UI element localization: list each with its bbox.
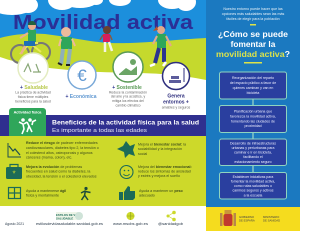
text: intro: Nuestro entorno puede hacer que las <box>223 7 283 11</box>
box: reorganizacion: bicicleta <box>247 91 259 95</box>
box: iniciativas: Establecer iniciativas para <box>233 175 273 179</box>
text: entornos: amables y seguros <box>162 106 191 110</box>
text: entornos <box>162 94 191 110</box>
panel: illustrated header <box>0 0 206 82</box>
text: saludable: física tiene múltiples <box>18 95 49 99</box>
illustration: walking woman <box>150 26 171 66</box>
icon: euro: € <box>77 66 87 85</box>
text: reduce riesgo: cánceres (mama, colon), etc. <box>26 156 72 160</box>
heading: movilidad activa ? <box>216 49 290 59</box>
footer: links <box>5 222 183 226</box>
text: agil <box>26 189 66 198</box>
text: sostenible <box>109 85 147 108</box>
text: intro <box>222 7 284 21</box>
logo: estilos de vida saludable: SALUDABLE <box>56 216 73 220</box>
box: iniciativas: fomentar la movilidad activa, <box>231 180 275 184</box>
footer: links: Agosto 2021 <box>5 222 24 226</box>
text: peso adecuado <box>139 189 184 198</box>
text: saludable: beneficios para la salud <box>15 100 51 104</box>
text: intro: fáciles de elegir para la población <box>226 17 280 21</box>
box: infraestructuras: Desarrollo de infraestructuras <box>230 142 276 146</box>
text: gobierno: GOBIERNO <box>239 215 255 219</box>
box: planificacion: Planificación urbana que <box>234 110 272 114</box>
text: mejora evolucion: frecuentes en salud como la diabetes, la <box>26 170 90 174</box>
tab: actividad fisica: Actividad física <box>14 110 42 114</box>
footer: links: www.mscbs.gob.es <box>113 222 148 226</box>
footer: links: @sanidadgob <box>158 222 183 226</box>
illustration: walking older person <box>58 27 75 65</box>
box: infraestructuras: caminar e ir en bicicleta, <box>234 150 272 154</box>
text: reduce riesgo: cardiovasculares, diabetes tipo 2, la tensión o <box>26 146 99 150</box>
box: planificacion: favorezca la movilidad activa, <box>230 114 276 118</box>
icon: euro <box>68 61 96 89</box>
text: bienestar social <box>138 142 186 156</box>
text: mejora evolucion: obesidad, la tensión o el colesterol elevados <box>26 174 97 178</box>
panel: benefits banner <box>0 115 206 136</box>
text: gobierno: DE SANIDAD <box>263 218 280 222</box>
text: peso adecuado: Ayuda a mantener un peso <box>139 189 184 193</box>
heading: fomentar la <box>231 39 276 49</box>
text: entornos: entornos + <box>163 100 189 106</box>
heading: ¿Cómo se puede <box>218 29 288 39</box>
box: planificacion <box>220 106 286 132</box>
icon: smiley <box>120 166 133 178</box>
text: bienestar emocional <box>138 165 192 178</box>
text: sostenible: cambio climático <box>115 104 141 108</box>
text: bienestar social: Mejora el bienestar social: la <box>138 142 186 146</box>
panel: benefits list <box>0 136 206 206</box>
box: reorganizacion: quienes caminan y van en <box>233 86 273 90</box>
text: bienestar social: sociabilidad y la integración <box>138 147 182 151</box>
panel: government footer <box>206 207 300 231</box>
icon: social star <box>117 141 135 158</box>
box: reorganizacion: Reorganización del reparto <box>232 76 274 80</box>
panel: benefits banner: Es importante a todas las edades <box>52 128 147 134</box>
panel: how to promote <box>206 0 300 207</box>
tab: actividad fisica <box>9 108 46 136</box>
text: reduce riesgo: el colesterol altos, osteoporosis y algunos <box>26 151 93 155</box>
text: saludable: La práctica de actividad <box>15 90 51 94</box>
box: planificacion: fomentando las ciudades de <box>231 120 275 124</box>
text: agil: física y mentalmente <box>26 194 59 198</box>
box: infraestructuras: estacionamiento seguro <box>234 160 272 164</box>
icon: entornos <box>162 62 190 90</box>
box: iniciativas: a la escuela <box>244 194 262 198</box>
text: peso adecuado: adecuado <box>139 194 155 198</box>
text: entornos: Genera <box>167 94 185 100</box>
title: Movilidad activa <box>13 12 194 34</box>
text: sostenible: Reduce la contaminación <box>109 90 147 94</box>
box: infraestructuras: facilitando el <box>243 155 263 159</box>
icon: dancer <box>81 187 90 200</box>
logo: estilos de vida saludable: ESTILOS DE VIDA <box>56 213 80 217</box>
icon: thumbs up <box>119 186 135 200</box>
text: mejora evolucion: Mejora la evolución de problemas <box>26 165 82 169</box>
text: sostenible: + Sostenible <box>112 85 142 91</box>
text: saludable <box>15 85 51 104</box>
illustration: cyclist <box>11 21 50 63</box>
box: iniciativas: como rutas saludables o <box>234 184 272 188</box>
icon: saludable <box>18 53 48 83</box>
text: agil: Ayuda a mantenerse ágil <box>26 189 66 193</box>
text: gobierno: DE ESPAÑA <box>239 218 255 222</box>
text: gobierno <box>239 215 280 222</box>
icon: coat of arms <box>220 210 236 226</box>
text: reduce riesgo: Reduce el riesgo de padecer enfermedades <box>26 141 98 145</box>
box: iniciativas <box>220 172 286 199</box>
box: infraestructuras <box>220 139 286 166</box>
panel: benefits banner: Beneficios de la actividad física para la salud <box>52 120 199 126</box>
text: bienestar emocional: reduce los síntomas de ansiedad <box>138 170 191 174</box>
icon: puzzle grid <box>8 188 20 198</box>
text: sostenible: del aire y la acústica, y <box>111 94 145 98</box>
heading <box>216 29 290 59</box>
box: reorganizacion <box>220 72 286 99</box>
text: bienestar emocional: Mejora del bienestar emocional: <box>138 165 192 169</box>
text: economica: + Económica <box>66 94 97 100</box>
illustration: walking girl <box>100 26 112 52</box>
icon: falling risk chart <box>8 143 21 157</box>
footer: links: estilosdevidasaludable.sanidad.gob.es <box>36 222 103 226</box>
text: saludable: + Saludable <box>20 85 48 91</box>
icon: web globe <box>126 212 134 220</box>
text: sostenible: mitiga los efectos del <box>112 99 144 103</box>
text: reduce riesgo <box>26 141 99 160</box>
logo: estilos de vida saludable <box>56 212 83 220</box>
icon: medical case: * <box>12 170 16 178</box>
text: mejora evolucion <box>26 165 97 178</box>
icon: share <box>166 211 176 221</box>
box: planificacion: proximidad <box>244 124 262 128</box>
icon: medical case <box>6 164 22 179</box>
text: gobierno: MINISTERIO <box>263 215 280 219</box>
text: bienestar emocional: y estrés y mejora el sueño <box>138 174 180 178</box>
box: iniciativas: caminos seguros y activos <box>232 188 274 192</box>
icon: sostenible <box>113 52 143 82</box>
text: intro: opciones más saludables sean las más <box>222 12 284 16</box>
text: bienestar social: social <box>138 152 147 156</box>
box: reorganizacion: del espacio público a favor de <box>230 81 276 85</box>
box: infraestructuras: urbanas y periurbanas para <box>232 146 274 150</box>
